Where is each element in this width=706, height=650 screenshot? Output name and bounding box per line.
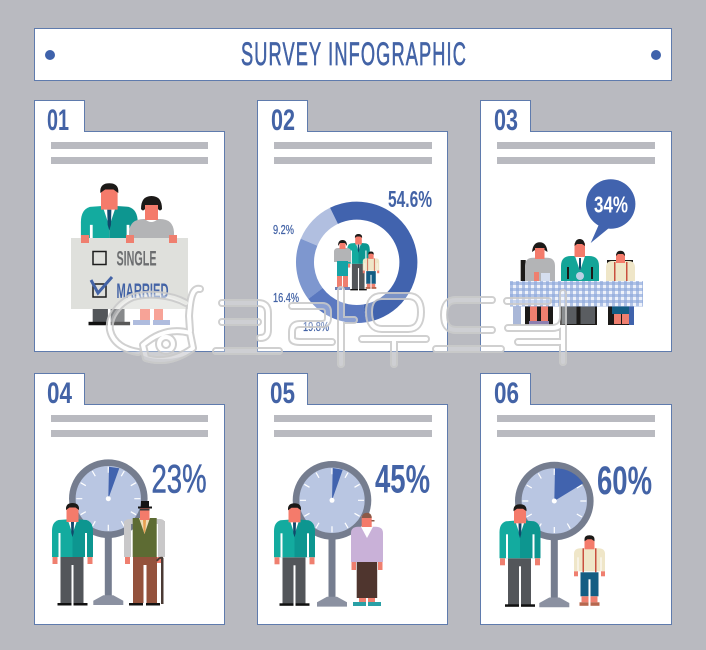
- value labels: [273, 186, 432, 334]
- man and woman holding sign: [71, 183, 188, 326]
- clock gauge: [72, 463, 144, 605]
- donut chart: [284, 190, 429, 335]
- value labels: 54.6%: [388, 186, 432, 212]
- seated woman: [513, 242, 555, 325]
- value labels: 9.2%: [273, 223, 294, 237]
- panel 02: family donut chart: 02: [271, 104, 295, 137]
- option: married: [91, 277, 168, 303]
- option: single: SINGLE: [116, 248, 156, 270]
- title banner: [34, 28, 672, 80]
- value: 45%: 45%: [375, 458, 430, 502]
- option: single: [93, 248, 156, 270]
- seated man: [560, 239, 599, 325]
- panel 05: clock 45%: [258, 374, 448, 624]
- panel 06: clock 60%: 06: [494, 377, 519, 410]
- figure: child: [574, 535, 605, 606]
- family figures: [334, 234, 379, 291]
- option: married: MARRIED: [116, 280, 168, 303]
- figure: elderly woman: [351, 513, 383, 606]
- title banner: SURVEY INFOGRAPHIC: [241, 36, 467, 72]
- figure: man: [500, 504, 540, 607]
- value: 23%: 23%: [152, 458, 206, 502]
- panel 01: marital status: 01: [47, 104, 69, 137]
- watermark overlay: [110, 289, 563, 364]
- panel 04: clock 23%: [34, 374, 224, 624]
- speech bubble 34%: 34%: [594, 192, 628, 218]
- value labels: 19.8%: [303, 320, 329, 334]
- panel 01: marital status: [34, 100, 224, 352]
- clock gauge: [296, 464, 368, 607]
- figure: man: [274, 503, 315, 606]
- panel 06: clock 60%: [480, 374, 672, 624]
- panel 03: people at table: [480, 100, 672, 352]
- figure: man: [52, 503, 93, 606]
- gingham table: [510, 281, 643, 306]
- figure: elderly man with cane: [124, 501, 165, 606]
- panel 02: family donut chart: [258, 100, 448, 352]
- value labels: 16.4%: [273, 291, 299, 305]
- panel 03: people at table: 03: [494, 104, 518, 137]
- clock gauge: [518, 465, 590, 607]
- speech bubble 34%: [586, 179, 635, 243]
- panel 04: clock 23%: 04: [47, 377, 72, 410]
- value: 60%: 60%: [597, 459, 652, 503]
- seated child: [606, 251, 635, 325]
- panel 05: clock 45%: 05: [270, 377, 295, 410]
